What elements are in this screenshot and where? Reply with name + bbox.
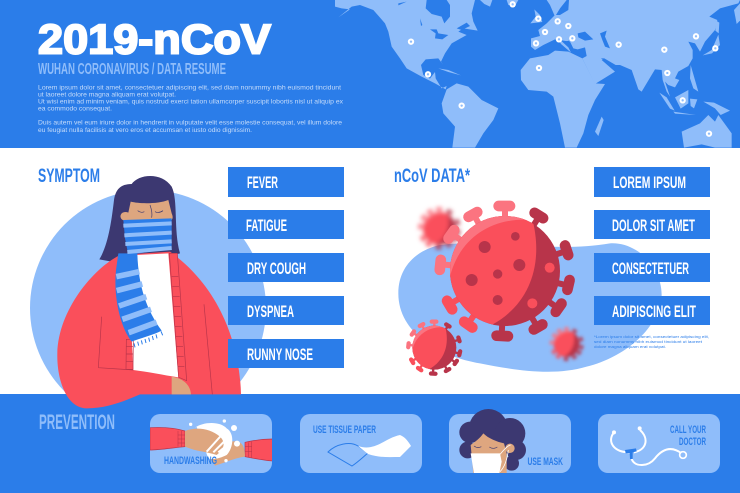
- card: handwashing: HANDWASHING: [164, 455, 217, 467]
- card: handwashing: [150, 414, 272, 473]
- card: use mask: [449, 409, 571, 473]
- symptom labels: FEVER: [247, 173, 278, 192]
- intro paragraph: Duis autem vel eum iriure dolor in hendrerit in vulputate velit esse molestie consequat, vel illum dolore: [38, 120, 342, 126]
- symptom labels: DYSPNEA: [247, 302, 294, 321]
- card: use mask: USE MASK: [528, 456, 563, 468]
- header background: [0, 0, 740, 148]
- card: call your doctor: DOCTOR: [679, 436, 706, 448]
- footnote: *Lorem ipsum dolor sit amet, consectetuer adipiscing elit,: [594, 334, 709, 339]
- symptom labels: RUNNY NOSE: [247, 345, 313, 364]
- symptom heading: SYMPTOM: [38, 166, 100, 187]
- symptom labels: [228, 167, 344, 368]
- symptom labels: FATIGUE: [246, 216, 287, 235]
- prevention heading: PREVENTION: [39, 410, 115, 434]
- intro paragraph: [38, 84, 344, 134]
- world map with location pins: [335, 0, 740, 148]
- symptom labels: DRY COUGH: [247, 259, 306, 278]
- illustration: person wearing scarf: [57, 176, 241, 408]
- ncov data heading: nCoV DATA*: [394, 166, 470, 187]
- intro paragraph: ea commodo consequat.: [38, 106, 112, 112]
- data labels: LOREM IPSUM: [613, 173, 686, 192]
- intro paragraph: Ut wisi enim ad minim veniam, quis nostrud exerci tation ullamcorper suscipit lobortis nisl ut aliquip ex: [38, 98, 344, 106]
- card: call your doctor: CALL YOUR: [670, 424, 706, 436]
- subtitle: WUHAN CORONAVIRUS / DATA RESUME: [38, 61, 226, 78]
- card: tissue paper: USE TISSUE PAPER: [313, 424, 376, 436]
- card: tissue paper: [300, 414, 422, 473]
- footnote: dolore magna aliquam erat volutpat.: [594, 344, 666, 349]
- backdrop circle behind person: [30, 190, 266, 426]
- title: 2019-nCoV: [38, 16, 271, 62]
- virus illustration on blob: [398, 201, 662, 376]
- card: call your doctor: [598, 414, 720, 473]
- intro paragraph: ut laoreet dolore magna aliquam erat volutpat.: [38, 92, 176, 98]
- intro paragraph: eu feugiat nulla facilisis at vero eros et accumsan et iusto odio dignissim.: [38, 127, 252, 134]
- intro paragraph: Lorem ipsum dolor sit amet, consectetuer adipiscing elit, sed diam nonummy nibh euismod tincidunt: [38, 84, 341, 92]
- prevention band background: [0, 394, 740, 493]
- footnote: sed diam nonummy nibh euismod tincidunt ut laoreet: [594, 339, 703, 344]
- data labels: [594, 167, 710, 325]
- footnote: [594, 334, 709, 349]
